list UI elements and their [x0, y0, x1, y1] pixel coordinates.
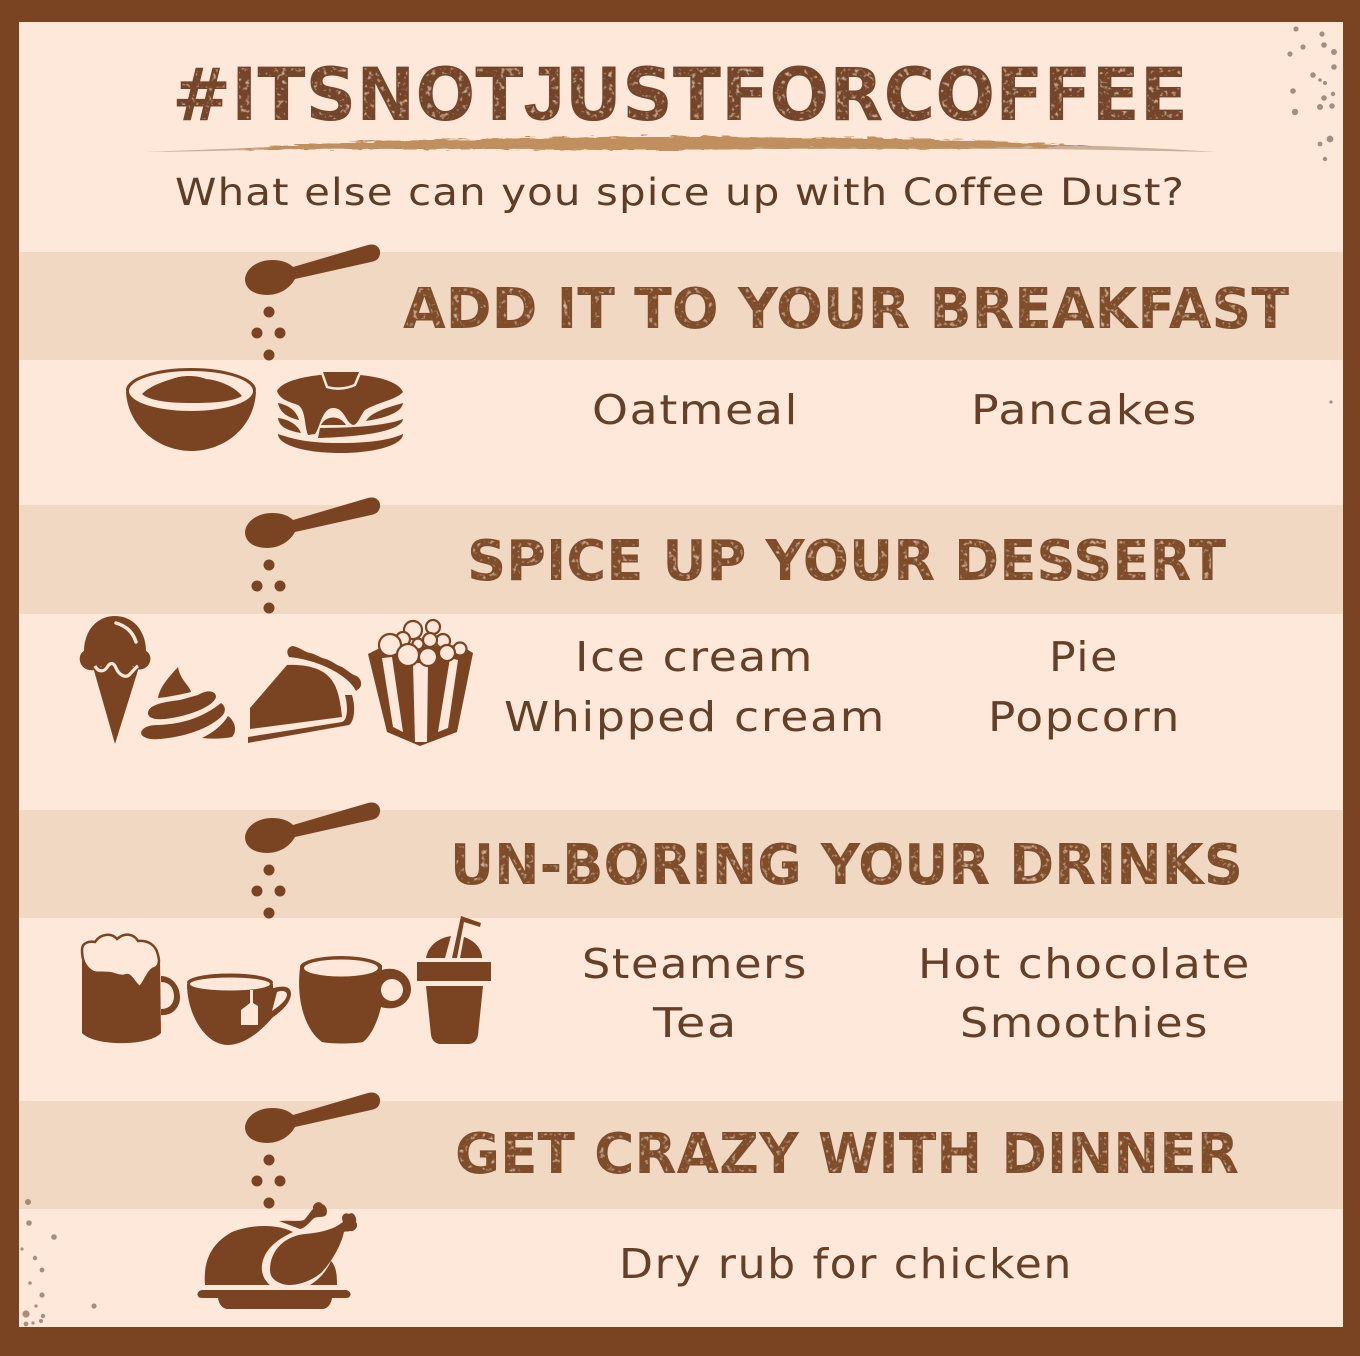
brush stroke under title [145, 136, 1215, 152]
icon: roast chicken on platter [198, 1202, 357, 1309]
section: dessert [80, 498, 1226, 746]
band: breakfast [19, 252, 1343, 360]
icon: pancakes [277, 372, 403, 453]
icon: whipped cream [141, 667, 235, 739]
label: steamers and tea: Steamers [582, 940, 808, 988]
label: steamers and tea: Tea [652, 999, 738, 1047]
section: breakfast [126, 245, 1289, 453]
label: hot chocolate and smoothies: Smoothies [960, 999, 1209, 1047]
decorative coffee dust: bottom left [20, 1199, 97, 1326]
label: ice cream and whipped cream [504, 633, 886, 741]
label: hot chocolate and smoothies [918, 940, 1251, 1047]
label: pancakes: Pancakes [971, 386, 1198, 434]
band: dinner [19, 1101, 1343, 1209]
icon: ice cream cone [80, 616, 150, 744]
decorative coffee dust: top right [1287, 26, 1337, 404]
heading: get crazy with dinner: GET CRAZY WITH DINNER [455, 1122, 1239, 1187]
subtitle: What else can you spice up with Coffee Dust? [175, 171, 1185, 214]
icon: spoon with falling dust [245, 245, 380, 360]
icon: coffee cup [299, 956, 411, 1044]
label: dry rub for chicken: Dry rub for chicken [619, 1240, 1073, 1288]
label: oatmeal: Oatmeal [592, 386, 799, 434]
icon: spoon with falling dust [245, 803, 380, 918]
heading: add it to your breakfast: ADD IT TO YOUR BREAKFAST [403, 277, 1289, 342]
label: ice cream and whipped cream: Ice cream [575, 633, 814, 681]
section: dinner [198, 1093, 1239, 1309]
icon: pie slice [248, 646, 361, 743]
icon: spoon with falling dust [245, 1093, 380, 1208]
label: ice cream and whipped cream: Whipped cream [504, 693, 886, 741]
icon: tea cup with tag [187, 974, 291, 1045]
icon: frothy mug [82, 935, 180, 1043]
label: steamers and tea [582, 940, 808, 1047]
label: pie and popcorn [988, 633, 1181, 741]
heading: un-boring your drinks: UN-BORING YOUR DRINKS [450, 833, 1243, 898]
label: pie and popcorn: Pie [1049, 633, 1119, 681]
label: pie and popcorn: Popcorn [988, 693, 1181, 741]
band: drinks [19, 810, 1343, 918]
icon: popcorn box [368, 620, 473, 746]
label: hot chocolate and smoothies: Hot chocolate [918, 940, 1251, 988]
icon: oatmeal bowl [126, 368, 256, 451]
title: #ITSNOTJUSTFORCOFFEE [172, 51, 1188, 138]
heading: spice up your dessert: SPICE UP YOUR DESSERT [467, 529, 1226, 594]
icon: spoon with falling dust [245, 498, 380, 614]
band: dessert [19, 505, 1343, 614]
icon: smoothie cup [417, 916, 491, 1044]
section: drinks [82, 803, 1251, 1047]
